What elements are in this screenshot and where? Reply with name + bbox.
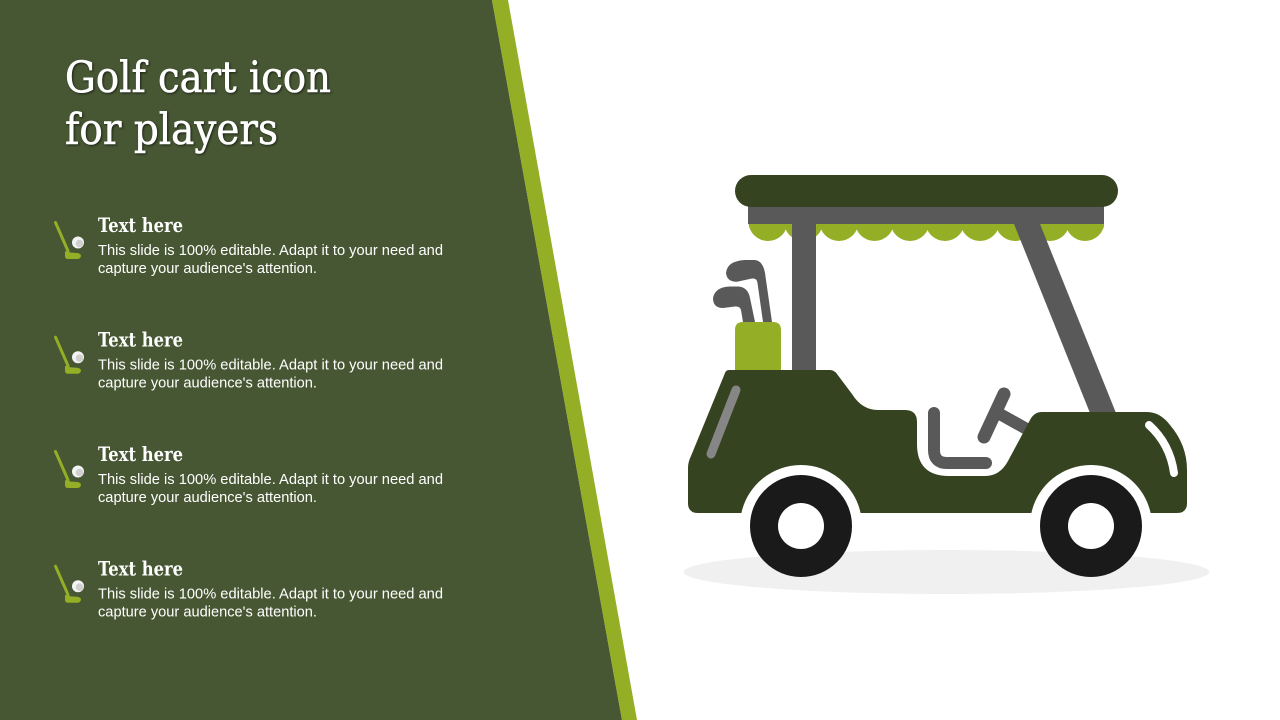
title: Golf cart icon xyxy=(65,53,331,103)
body text 4: capture your audience's attention. xyxy=(98,605,317,621)
body text 2: This slide is 100% editable. Adapt it to your need and xyxy=(98,358,443,374)
rear pole xyxy=(792,224,816,371)
title xyxy=(65,53,331,155)
icon: golf clubs xyxy=(713,260,772,322)
cart body xyxy=(688,370,1187,513)
front strut xyxy=(1014,224,1116,413)
icon: golf club and ball 2 xyxy=(56,337,84,374)
steering wheel xyxy=(984,394,1032,437)
heading 3: Text here xyxy=(98,442,183,466)
body text 2 xyxy=(98,358,443,392)
roof support bar xyxy=(748,206,1104,224)
rear window highlight xyxy=(711,390,736,454)
body text 1 xyxy=(98,243,443,277)
golf cart illustration xyxy=(684,175,1210,594)
ground shadow xyxy=(684,550,1210,594)
body text 1: This slide is 100% editable. Adapt it to your need and xyxy=(98,243,443,259)
golf bag xyxy=(735,322,781,370)
body text 4: This slide is 100% editable. Adapt it to your need and xyxy=(98,587,443,603)
body text 3 xyxy=(98,472,443,506)
awning scallops xyxy=(748,224,1104,241)
left panel background xyxy=(0,0,622,720)
wheel arches xyxy=(741,465,1151,530)
seat frame xyxy=(934,413,986,463)
title: for players xyxy=(65,105,278,155)
front wheel xyxy=(1040,475,1142,577)
heading 4: Text here xyxy=(98,557,183,581)
body text 4 xyxy=(98,587,443,621)
list item 2 xyxy=(56,328,443,392)
icon: golf club and ball 4 xyxy=(56,566,84,603)
icon: golf club and ball 3 xyxy=(56,452,84,488)
icon: golf club and ball 1 xyxy=(56,222,84,259)
list item 3 xyxy=(56,442,443,506)
front highlight xyxy=(1149,425,1174,473)
list item 1 xyxy=(56,213,443,277)
heading 1: Text here xyxy=(98,213,183,237)
rear wheel xyxy=(750,475,852,577)
heading 2: Text here xyxy=(98,328,183,352)
green diagonal stripe xyxy=(492,0,637,720)
body text 2: capture your audience's attention. xyxy=(98,376,317,392)
body text 3: This slide is 100% editable. Adapt it to your need and xyxy=(98,472,443,488)
body text 1: capture your audience's attention. xyxy=(98,261,317,277)
list item 4 xyxy=(56,557,443,621)
body text 3: capture your audience's attention. xyxy=(98,490,317,506)
roof xyxy=(735,175,1118,207)
